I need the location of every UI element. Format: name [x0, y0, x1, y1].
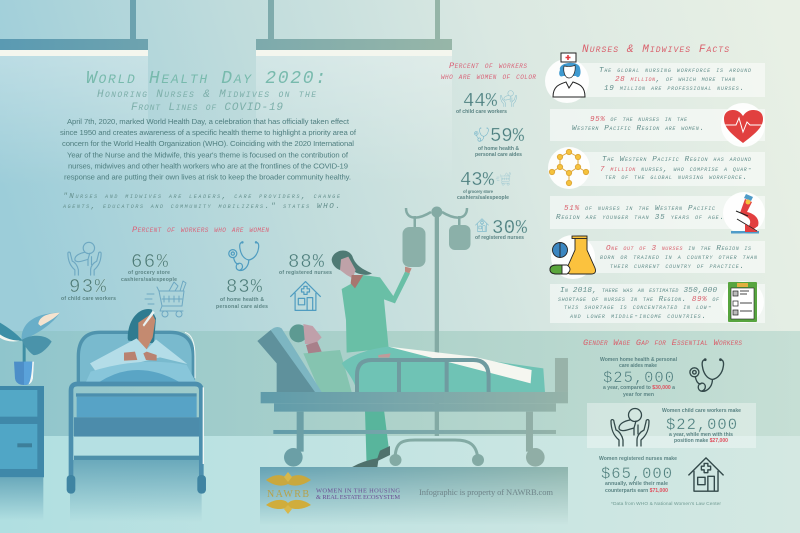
- fact 1: The global nursing workforce is around: [599, 67, 751, 75]
- fact 2: 95% of the nurses in the: [590, 116, 688, 124]
- heading: wage gap: Gender Wage Gap for Essential Workers: [583, 338, 742, 348]
- stat: 66 percent grocery: 66%: [131, 251, 169, 273]
- intro paragraph: since 1950 and creates awareness of a specific health theme to highlight a priority area of: [60, 128, 357, 137]
- fact 3: ter of the global nursing workforce.: [605, 174, 747, 182]
- stat: 88 percent registered nurses: of registered nurses: [279, 270, 332, 276]
- fact 5: [550, 235, 765, 279]
- fact 1: 28 million, of which more than: [615, 76, 735, 84]
- wage: registered nurses: counterparts earn $71,000: [605, 488, 668, 494]
- stat: 59 percent: 59%: [490, 125, 525, 147]
- nawrb logo: [266, 472, 311, 514]
- wage: home health: [600, 357, 724, 398]
- stat: 59 percent: personal care aides: [475, 152, 522, 158]
- wage: home health: a year, compared to $30,000 a: [603, 385, 675, 391]
- window frames: [0, 0, 452, 186]
- title: World Health Day 2020:: [86, 69, 326, 89]
- who quote: "Nurses and midwives are leaders, care providers, change: [63, 193, 341, 201]
- logo tagline: WOMEN IN THE HOUSING: [316, 488, 400, 494]
- fact 3: 7 million nurses, who comprise a quar-: [600, 166, 752, 174]
- who quote: agents, educators and community mobilizers." states WHO.: [62, 203, 340, 211]
- icon: nurse: [553, 53, 585, 97]
- wage: registered nurses: $65,000: [601, 465, 672, 483]
- wage: child care: a year, while men with this: [669, 432, 733, 438]
- icon: microscope: [731, 194, 759, 234]
- heading: women of color: [441, 61, 536, 82]
- fact 4: Region are younger than 35 years of age.: [556, 214, 724, 222]
- footer panel: [260, 467, 568, 525]
- data source note: *Data from WHO & National Women's Law Center: [611, 501, 721, 507]
- heading: women of color: who are women of color: [441, 72, 536, 82]
- stat: 30 percent: 30%: [492, 217, 528, 239]
- hospital bed with patient: [67, 309, 206, 522]
- icon: flask and pills: [550, 236, 596, 274]
- stat: 59 percent: [474, 125, 525, 158]
- fact 2: Western Pacific Region are women.: [572, 125, 704, 133]
- fact 5: their current country of practice.: [610, 263, 744, 271]
- stat: 43 percent: of grocery store: [463, 189, 494, 194]
- fact 1: 19 million are professional nurses.: [604, 85, 744, 93]
- wage: registered nurses: annually, while their male: [605, 481, 668, 487]
- intro paragraph: Year of the Nurse and the Midwife, this year's theme is focused on the contribution of: [67, 150, 349, 160]
- icon: heart: [724, 110, 763, 143]
- wage: home health: care aides make: [619, 363, 657, 369]
- stat: 30 percent: [475, 217, 528, 241]
- icon: clipboard: [728, 282, 757, 322]
- icon: molecule: [549, 149, 589, 186]
- heading: facts: Nurses & Midwives Facts: [582, 44, 729, 56]
- wall band: [0, 331, 800, 436]
- stat: 66 percent grocery: cashiers/salespeople: [121, 277, 177, 283]
- fact 5: One out of 3 nurses in the Region is: [606, 245, 751, 253]
- logo tagline: & REAL ESTATE ECOSYSTEM: [316, 494, 400, 501]
- stat: 88 percent registered nurses: 88%: [288, 251, 325, 273]
- stat: 44 percent: [456, 90, 517, 115]
- stat: 93 percent child care: 93%: [69, 276, 107, 298]
- property note: Infographic is property of NAWRB.com: [419, 487, 553, 497]
- stat: 43 percent: 43%: [460, 169, 495, 191]
- wage: child care: position make $27,000: [674, 438, 728, 444]
- stat: 93 percent child care: of child care workers: [61, 296, 116, 302]
- intro paragraph: response and are putting their own lives at risk to keep the broader community healthy.: [64, 173, 351, 182]
- night stand with plant: [0, 313, 60, 521]
- fact 3: [548, 147, 765, 189]
- wage: registered nurses: Women registered nurses make: [599, 456, 677, 462]
- nurse and patient bed: [257, 250, 568, 467]
- heading: percent women: Percent of workers who are women: [132, 225, 269, 235]
- fact 6: In 2018, there was an estimated 350,000: [560, 287, 717, 295]
- wage: home health: $25,000: [603, 369, 674, 387]
- fact 4: 51% of nurses in the Western Pacific: [564, 205, 715, 213]
- stat: 88 percent registered nurses: [279, 251, 332, 310]
- fact 6: this shortage is concentrated in low-: [564, 304, 712, 312]
- heading: women of color: Percent of workers: [449, 61, 527, 71]
- stat: 83 percent home health: of home health &: [220, 297, 264, 303]
- iv pole and bags: [390, 206, 484, 466]
- stat: 43 percent: cashiers/salespeople: [457, 195, 509, 201]
- intro paragraph: April 7th, 2020, marked World Health Day, a celebration that has officially taken effect: [67, 117, 350, 126]
- stat: 66 percent grocery: of grocery store: [128, 270, 170, 276]
- stat: 43 percent: [457, 169, 511, 201]
- floor: [0, 436, 800, 533]
- logo tagline: [316, 488, 400, 501]
- wage: home health: Women home health & personal: [600, 357, 678, 363]
- stat: 30 percent: of registered nurses: [475, 235, 524, 241]
- fact 1: [545, 53, 765, 103]
- title: [86, 69, 326, 114]
- intro paragraph: concern for the World Health Organization (WHO). Coinciding with the 2020 International: [62, 139, 354, 148]
- wage: home health: year for men: [623, 392, 654, 398]
- intro paragraph: nurses, midwives and other health workers who are at the frontlines of the COVID-19: [68, 162, 348, 171]
- wage: registered nurses: [599, 456, 724, 494]
- wage: child care: Women child care workers make: [662, 408, 741, 414]
- stat: 66 percent grocery: [121, 251, 186, 317]
- stat: 59 percent: of home health &: [478, 146, 519, 152]
- fact 2: [550, 103, 765, 147]
- wage: child care: [587, 403, 756, 448]
- who quote: [62, 193, 341, 211]
- fact 4: [550, 192, 765, 234]
- intro paragraph: [60, 117, 357, 182]
- stat: 83 percent home health: [216, 242, 268, 310]
- title: Honoring Nurses & Midwives on the: [97, 89, 316, 101]
- title: Front Lines of COVID-19: [131, 102, 283, 114]
- fact 6: [550, 281, 765, 323]
- fact 5: born or trained in a country other than: [600, 254, 757, 262]
- stat: 83 percent home health: 83%: [226, 276, 263, 298]
- stat: 93 percent child care: [61, 242, 116, 302]
- stat: 83 percent home health: personal care aides: [216, 304, 268, 310]
- wage: child care: $22,000: [666, 416, 737, 434]
- stat: 44 percent: of child care workers: [456, 109, 507, 115]
- fact 6: shortage of nurses in the Region. 89% of: [558, 296, 720, 304]
- fact 6: and lower middle-income countries.: [569, 313, 706, 321]
- fact 3: The Western Pacific Region has around: [602, 156, 751, 164]
- stat: 44 percent: 44%: [463, 90, 498, 112]
- nawrb logo: NAWRB: [267, 489, 309, 500]
